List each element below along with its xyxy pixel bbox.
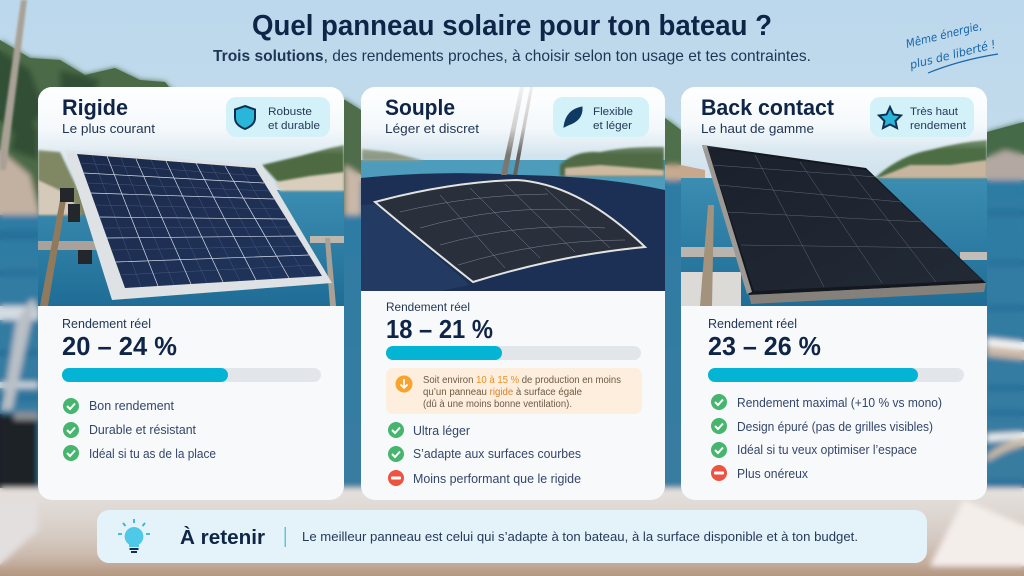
label: rendement: Rendement réel [62, 317, 151, 331]
sub-heading: Léger et discret [385, 121, 479, 136]
value: 18 – 21 % [386, 314, 493, 344]
icon: shield [235, 106, 255, 129]
handwritten note [904, 18, 998, 73]
list item: Idéal si tu as de la place [89, 446, 216, 461]
badge: flexible: Flexible [593, 106, 633, 118]
icon: light bulb [118, 519, 150, 553]
list item: S’adapte aux surfaces courbes [413, 446, 581, 461]
badge: robuste [226, 97, 330, 137]
title: Quel panneau solaire pour ton bateau ? [252, 10, 772, 42]
list item: Rendement maximal (+10 % vs mono) [737, 395, 942, 410]
handwritten note: plus de liberté ! [907, 37, 997, 72]
card body [361, 291, 665, 500]
photo: back contact panel [681, 87, 987, 306]
icon: feather [564, 107, 582, 127]
callout: production loss: qu’un panneau rigide à surface égale [423, 387, 582, 398]
heading: À retenir [180, 526, 265, 549]
badge: flexible [553, 97, 649, 137]
list item: Plus onéreux [737, 466, 808, 481]
progress bar [386, 346, 641, 360]
panel: souple [361, 87, 665, 500]
photo: rigid panel on railing [38, 87, 344, 306]
card header veil [38, 87, 344, 155]
sub-heading: Le haut de gamme [701, 121, 814, 136]
heading: Back contact [701, 95, 835, 120]
card header veil [361, 87, 665, 155]
list item: Moins performant que le rigide [413, 471, 581, 486]
takeaway bar [97, 510, 927, 563]
badge: rendement: rendement [910, 120, 966, 132]
list item [711, 465, 808, 481]
list item: Idéal si tu veux optimiser l’espace [737, 442, 917, 457]
list item [388, 422, 471, 438]
card body [38, 306, 344, 500]
sub-heading: Le plus courant [62, 121, 155, 136]
photo: flexible panel on canvas [361, 87, 665, 291]
handwritten note: Même énergie, [904, 18, 983, 51]
icon: star [879, 107, 901, 128]
value: 23 – 26 % [708, 331, 821, 361]
progress bar [62, 368, 321, 382]
takeaway text: Le meilleur panneau est celui qui s’adapte à ton bateau, à la surface disponible et à ton budget. [302, 529, 858, 544]
list item: Ultra léger [413, 423, 471, 438]
panel: rigide [38, 87, 344, 500]
badge: robuste: Robuste [268, 106, 312, 118]
list item: Durable et résistant [89, 422, 196, 437]
card header veil [681, 87, 987, 150]
list item [63, 398, 174, 414]
callout: production loss [386, 368, 642, 414]
callout: production loss: Soit environ 10 à 15 % de production en moins [423, 375, 621, 386]
list item: Design épuré (pas de grilles visibles) [737, 419, 933, 434]
label: rendement: Rendement réel [386, 300, 470, 314]
progress bar [708, 368, 964, 382]
badge: robuste: et durable [268, 120, 320, 132]
heading: Souple [385, 95, 455, 120]
badge: rendement [870, 97, 974, 137]
value: 20 – 24 % [62, 331, 177, 361]
panel: back contact [681, 87, 987, 500]
badge: rendement: Très haut [910, 106, 958, 118]
heading: Rigide [62, 95, 128, 120]
callout: production loss: (dû à une moins bonne ventilation). [423, 399, 572, 410]
card body [681, 306, 987, 500]
subtitle: Trois solutions, des rendements proches, à choisir selon ton usage et tes contraintes. [213, 48, 811, 65]
mast [0, 0, 27, 170]
label: rendement: Rendement réel [708, 317, 797, 331]
list item: Bon rendement [89, 398, 174, 413]
badge: flexible: et léger [593, 120, 632, 132]
